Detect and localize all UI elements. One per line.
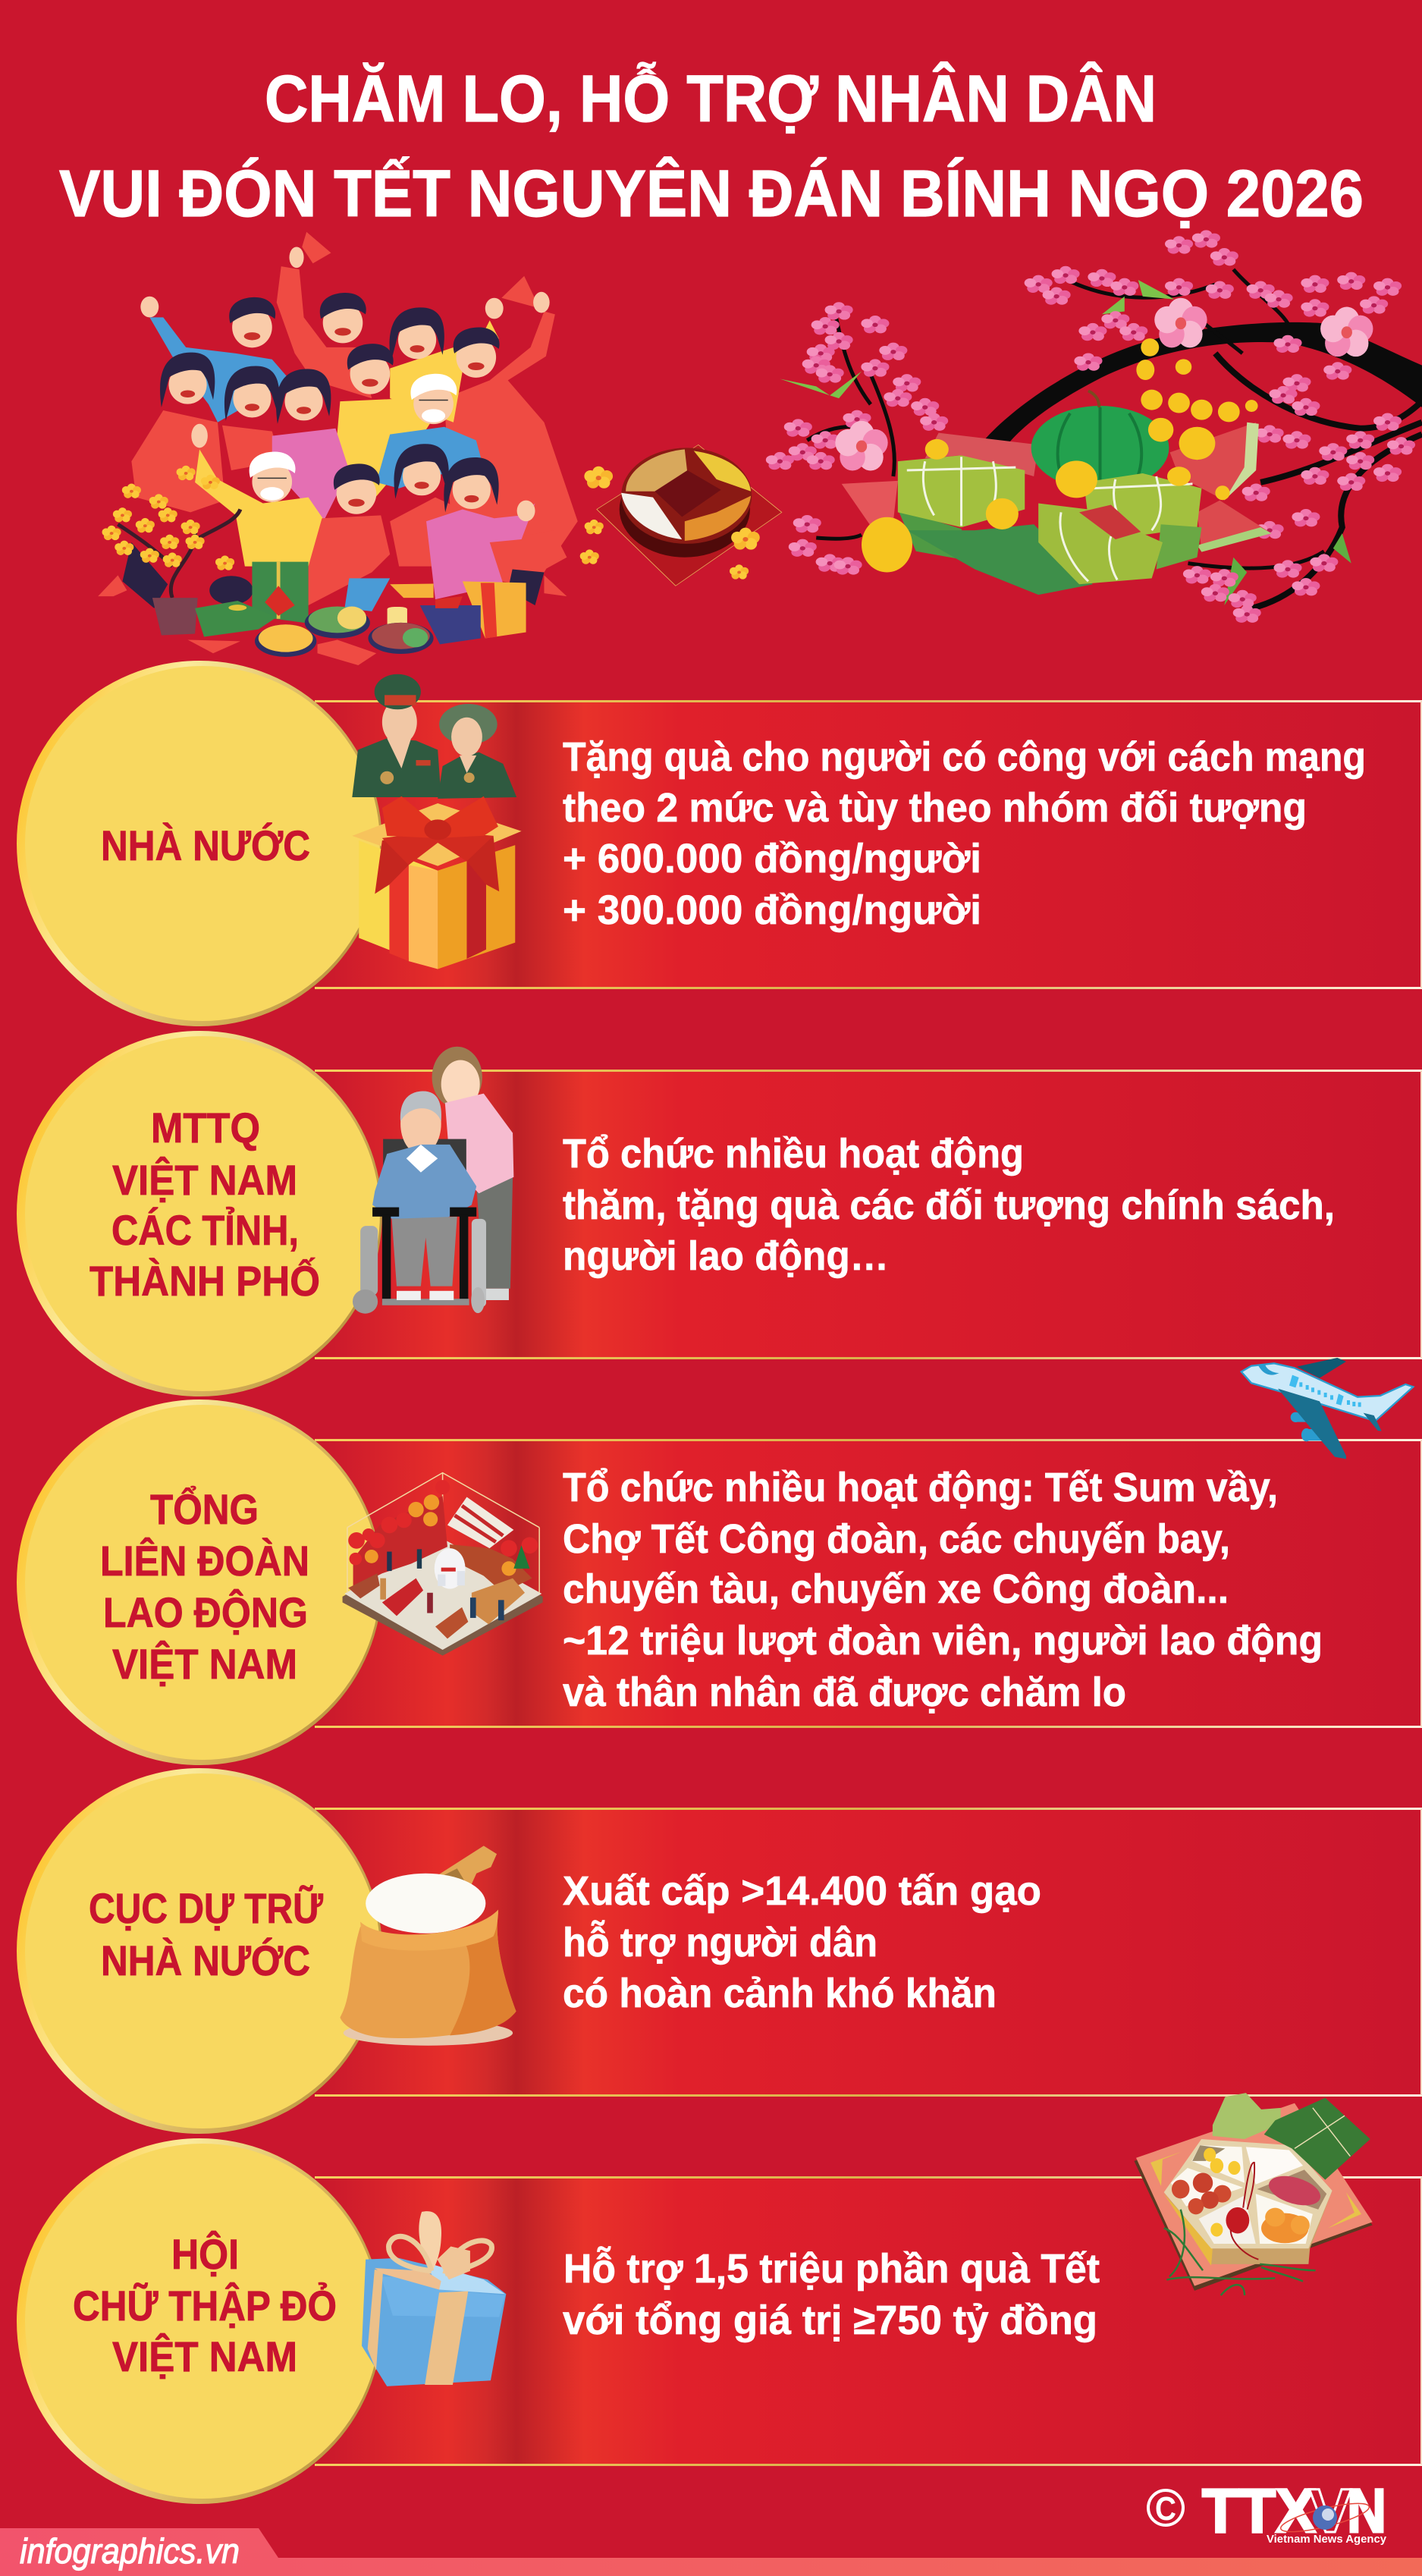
panel: Cục Dự trữ <box>17 1768 1422 2134</box>
heading: Tổng Liên đoàn: LIÊN ĐOÀN <box>100 1537 309 1585</box>
text: union activities: Chợ Tết Công đoàn, các chuyến bay, <box>563 1516 1230 1562</box>
text: union activities <box>563 1465 1323 1715</box>
heading: MTTQ: VIỆT NAM <box>112 1156 297 1204</box>
text: MTTQ activities: Tổ chức nhiều hoạt động <box>563 1131 1024 1176</box>
title: VUI ĐÓN TẾT NGUYÊN ĐÁN BÍNH NGỌ 2026 <box>59 156 1364 231</box>
heading: Hội Chữ thập đỏ <box>73 2230 337 2380</box>
title: CHĂM LO, HỖ TRỢ NHÂN DÂN <box>265 61 1157 136</box>
heading: Cục Dự trữ: NHÀ NƯỚC <box>101 1937 310 1984</box>
heading: Hội Chữ thập đỏ: VIỆT NAM <box>112 2333 297 2380</box>
heading: Tổng Liên đoàn: VIỆT NAM <box>112 1640 297 1688</box>
icon: isometric Tet market <box>343 1473 543 1656</box>
text: gifts for people with merit <box>563 734 1366 933</box>
text: union activities: Tổ chức nhiều hoạt động: Tết Sum vầy, <box>563 1465 1278 1510</box>
heading: MTTQ: CÁC TỈNH, <box>111 1206 299 1254</box>
text: MTTQ activities: thăm, tặng quà các đối tượng chính sách, <box>563 1183 1335 1228</box>
heading: Nhà nước: NHÀ NƯỚC <box>101 821 310 869</box>
logo: TTXVN Vietnam News Agency: N <box>1347 2477 1386 2546</box>
logo: TTXVN Vietnam News Agency: C <box>1155 2490 1176 2527</box>
icon: veterans and gift box <box>352 674 522 969</box>
text: gifts for people with merit: + 600.000 đồng/người <box>563 836 981 881</box>
icon: Tet tray with banh chung <box>1134 2093 1373 2295</box>
heading: MTTQ: MTTQ <box>151 1104 260 1151</box>
illustration: family celebrating Tet <box>98 232 578 665</box>
footer ribbon <box>0 2528 1422 2576</box>
circle badge <box>17 1768 382 2134</box>
text: rice release: có hoàn cảnh khó khăn <box>563 1971 997 2016</box>
band <box>315 2176 1422 2466</box>
icon: blue gift box <box>362 2211 506 2386</box>
circle badge <box>17 1031 382 1396</box>
text: MTTQ activities <box>563 1131 1335 1279</box>
logo: TTXVN Vietnam News Agency: Vietnam News Agency <box>1267 2533 1387 2546</box>
band <box>315 1439 1422 1728</box>
heading: Hội Chữ thập đỏ: CHỮ THẬP ĐỎ <box>73 2282 337 2329</box>
text: rice release <box>563 1868 1041 2016</box>
website label: infographics.vn <box>20 2531 240 2571</box>
circle badge <box>17 2138 382 2504</box>
illustration: apricot branch, watermelon and banh chung <box>766 230 1422 623</box>
text: Red Cross gifts: Hỗ trợ 1,5 triệu phần quà Tết <box>563 2246 1100 2292</box>
text: union activities: ~12 triệu lượt đoàn viên, người lao động <box>563 1618 1323 1663</box>
icon: rice sack and scoop <box>340 1846 516 2046</box>
panel: MTTQ <box>17 1031 1422 1396</box>
text: rice release: Xuất cấp >14.400 tấn gạo <box>563 1868 1041 1914</box>
title <box>59 61 1364 231</box>
heading: Tổng Liên đoàn <box>100 1485 309 1688</box>
heading: MTTQ <box>89 1104 320 1305</box>
text: MTTQ activities: người lao động… <box>563 1233 889 1279</box>
band <box>315 1070 1422 1359</box>
heading: Cục Dự trữ <box>89 1884 323 1984</box>
icon: airplane <box>1242 1358 1413 1459</box>
band <box>315 700 1422 989</box>
text: union activities: và thân nhân đã được chăm lo <box>563 1670 1126 1715</box>
logo: TTXVN Vietnam News Agency: TTX <box>1202 2477 1316 2546</box>
heading: Tổng Liên đoàn: LAO ĐỘNG <box>103 1588 308 1636</box>
panel: Nhà nước <box>17 661 1422 1026</box>
panel: Hội Chữ thập đỏ <box>17 2138 1422 2504</box>
heading: MTTQ: THÀNH PHỐ <box>89 1257 320 1305</box>
heading: Tổng Liên đoàn: TỔNG <box>150 1485 259 1533</box>
text: gifts for people with merit: Tặng quà cho người có công với cách mạng <box>563 734 1366 780</box>
heading: Cục Dự trữ: CỤC DỰ TRỮ <box>89 1884 323 1932</box>
text: Red Cross gifts <box>563 2246 1100 2343</box>
icon: caregiver and elderly man in wheelchair <box>353 1047 513 1314</box>
logo: TTXVN Vietnam News Agency: V <box>1309 2477 1351 2546</box>
text: rice release: hỗ trợ người dân <box>563 1920 877 1965</box>
text: gifts for people with merit: + 300.000 đồng/người <box>563 887 981 933</box>
text: union activities: chuyến tàu, chuyến xe Công đoàn... <box>563 1566 1229 1612</box>
circle badge <box>17 661 382 1026</box>
band <box>315 1808 1422 2097</box>
logo: TTXVN Vietnam News Agency <box>1148 2477 1387 2546</box>
panel: Tổng Liên đoàn <box>17 1400 1422 1765</box>
text: gifts for people with merit: theo 2 mức và tùy theo nhóm đối tượng <box>563 785 1307 831</box>
circle badge <box>17 1400 382 1765</box>
text: Red Cross gifts: với tổng giá trị ≥750 tỷ đồng <box>563 2298 1097 2343</box>
heading: Hội Chữ thập đỏ: HỘI <box>171 2230 239 2278</box>
illustration: mut Tet tray <box>580 445 782 586</box>
